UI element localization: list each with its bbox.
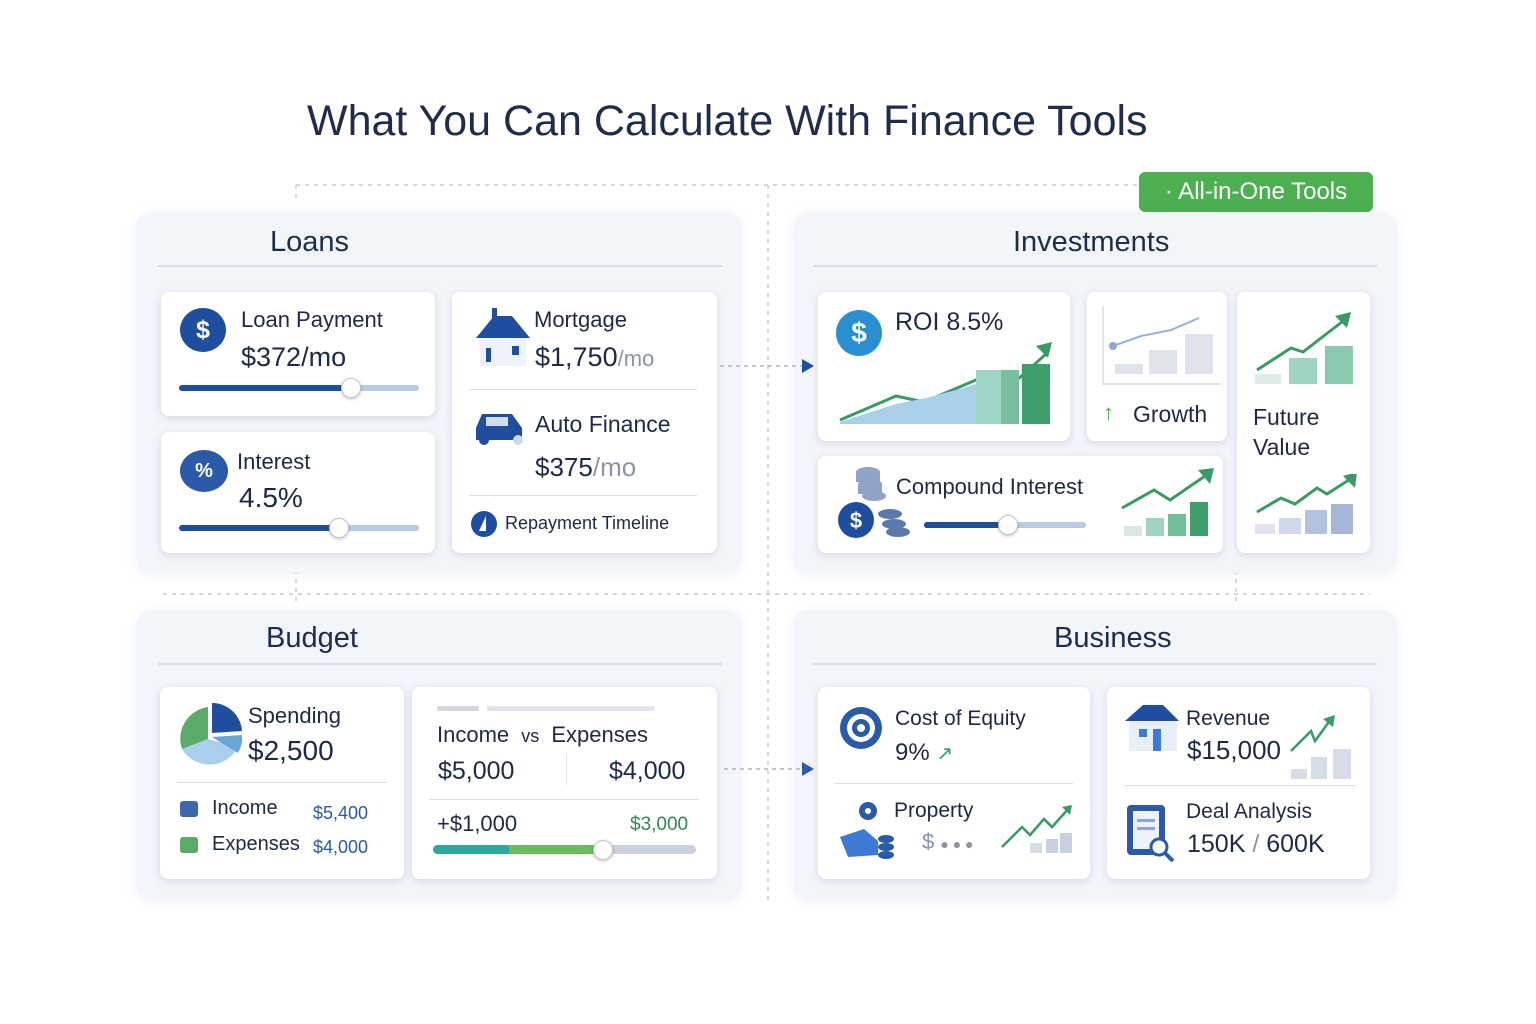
- card: mortgage / auto: Repayment Timeline: [505, 513, 669, 533]
- slider: [179, 385, 419, 391]
- legend: income: [180, 801, 198, 817]
- icon: target: [840, 707, 882, 749]
- card: mortgage / auto: Auto Finance: [535, 411, 671, 437]
- card: cost of equity / property: [818, 687, 1090, 879]
- icon: dollar: [180, 308, 226, 352]
- icon: property: [840, 802, 894, 859]
- card: mortgage / auto: [452, 292, 717, 553]
- icon: pie chart: [180, 703, 242, 764]
- card: income vs expenses: Income vs Expenses: [437, 722, 648, 747]
- icon: percent: %: [195, 460, 213, 482]
- icon: house: [476, 308, 530, 366]
- card: income vs expenses: $3,000: [630, 814, 688, 835]
- panel: investments: [793, 212, 1397, 573]
- slider: [924, 522, 1086, 528]
- card: cost of equity / property: Cost of Equity: [895, 707, 1026, 730]
- card: revenue / deal analysis: $15,000: [1187, 735, 1281, 765]
- chart: roi: [840, 342, 1052, 424]
- card: spending: Expenses: [212, 833, 300, 855]
- card: revenue / deal analysis: Revenue: [1186, 707, 1270, 730]
- card: spending: Spending: [248, 703, 341, 728]
- chart: revenue: [1290, 715, 1351, 779]
- chart: compound: [1121, 468, 1214, 536]
- panel: business: [793, 610, 1397, 900]
- card: interest: 4.5%: [239, 482, 303, 513]
- card: income vs expenses: $5,000: [438, 757, 514, 785]
- icon: money bag & coins: $: [850, 508, 862, 533]
- card: spending: $4,000: [313, 837, 368, 857]
- card: spending: $2,500: [248, 735, 334, 766]
- card: future value: Future: [1253, 404, 1319, 430]
- card: revenue / deal analysis: 150K / 600K: [1187, 830, 1325, 858]
- icon: car: [476, 414, 523, 445]
- card: compound interest: [818, 456, 1223, 553]
- badge: All-in-One Tools: [1139, 172, 1373, 212]
- icon: dollar coin: $: [851, 317, 867, 348]
- badge: All-in-One Tools: · All-in-One Tools: [1165, 178, 1347, 205]
- card: loan payment: $372/mo: [241, 342, 346, 372]
- arrow: loans to investments: [720, 359, 814, 373]
- card: cost of equity / property: Property: [894, 799, 973, 822]
- card: mortgage / auto: Mortgage: [534, 307, 627, 332]
- card: revenue / deal analysis: [1107, 687, 1370, 879]
- heading: investments: Investments: [1013, 226, 1169, 258]
- card: compound interest: Compound Interest: [896, 474, 1083, 499]
- legend: expenses: [180, 837, 198, 853]
- icon: document search: [1127, 805, 1174, 862]
- card: loan payment: Loan Payment: [241, 307, 383, 332]
- icon: timeline: [471, 511, 497, 537]
- panel: loans: [136, 212, 742, 573]
- icon: dollar: $: [196, 316, 210, 344]
- card: spending: Income: [212, 797, 278, 819]
- card: income vs expenses: [412, 687, 717, 879]
- card: cost of equity / property: $ ● ● ●: [922, 829, 974, 854]
- card: income vs expenses: +$1,000: [437, 811, 517, 836]
- card: spending: [160, 687, 404, 879]
- card: interest: Interest: [237, 449, 310, 474]
- icon: percent: [180, 450, 228, 492]
- title: What You Can Calculate With Finance Tools: [307, 97, 1148, 145]
- icon: building: [1125, 705, 1179, 751]
- icon: money bag & coins: [838, 467, 910, 538]
- card: mortgage / auto: $1,750/mo: [535, 342, 654, 372]
- card: future value: [1237, 292, 1370, 553]
- heading: business: Business: [1054, 622, 1172, 654]
- slider: budget: [433, 845, 696, 854]
- card: ROI: ROI 8.5%: [895, 308, 1003, 336]
- card: spending: $5,400: [313, 803, 368, 823]
- card: cost of equity / property: 9% ↗: [895, 739, 953, 766]
- card: loan payment: [161, 292, 435, 416]
- panel: budget: [136, 610, 742, 900]
- icon: dollar coin: [836, 310, 882, 356]
- chart: growth: [1102, 306, 1221, 385]
- heading: loans: Loans: [270, 226, 349, 258]
- card: interest: [161, 432, 435, 553]
- card: growth: [1087, 292, 1227, 441]
- card: ROI: [818, 292, 1070, 441]
- card: growth: Growth: [1133, 401, 1207, 427]
- arrow: budget to business: [724, 762, 814, 776]
- slider: [179, 525, 419, 531]
- card: income vs expenses: $4,000: [609, 757, 685, 785]
- chart: fv bottom: [1255, 474, 1357, 534]
- chart: property: [1001, 805, 1072, 853]
- card: mortgage / auto: $375/mo: [535, 452, 636, 482]
- heading: budget: Budget: [266, 622, 358, 654]
- chart: fv top: [1255, 312, 1353, 384]
- card: revenue / deal analysis: Deal Analysis: [1186, 800, 1312, 823]
- card: future value: Value: [1253, 434, 1310, 460]
- icon: up arrow: ↑: [1103, 400, 1114, 425]
